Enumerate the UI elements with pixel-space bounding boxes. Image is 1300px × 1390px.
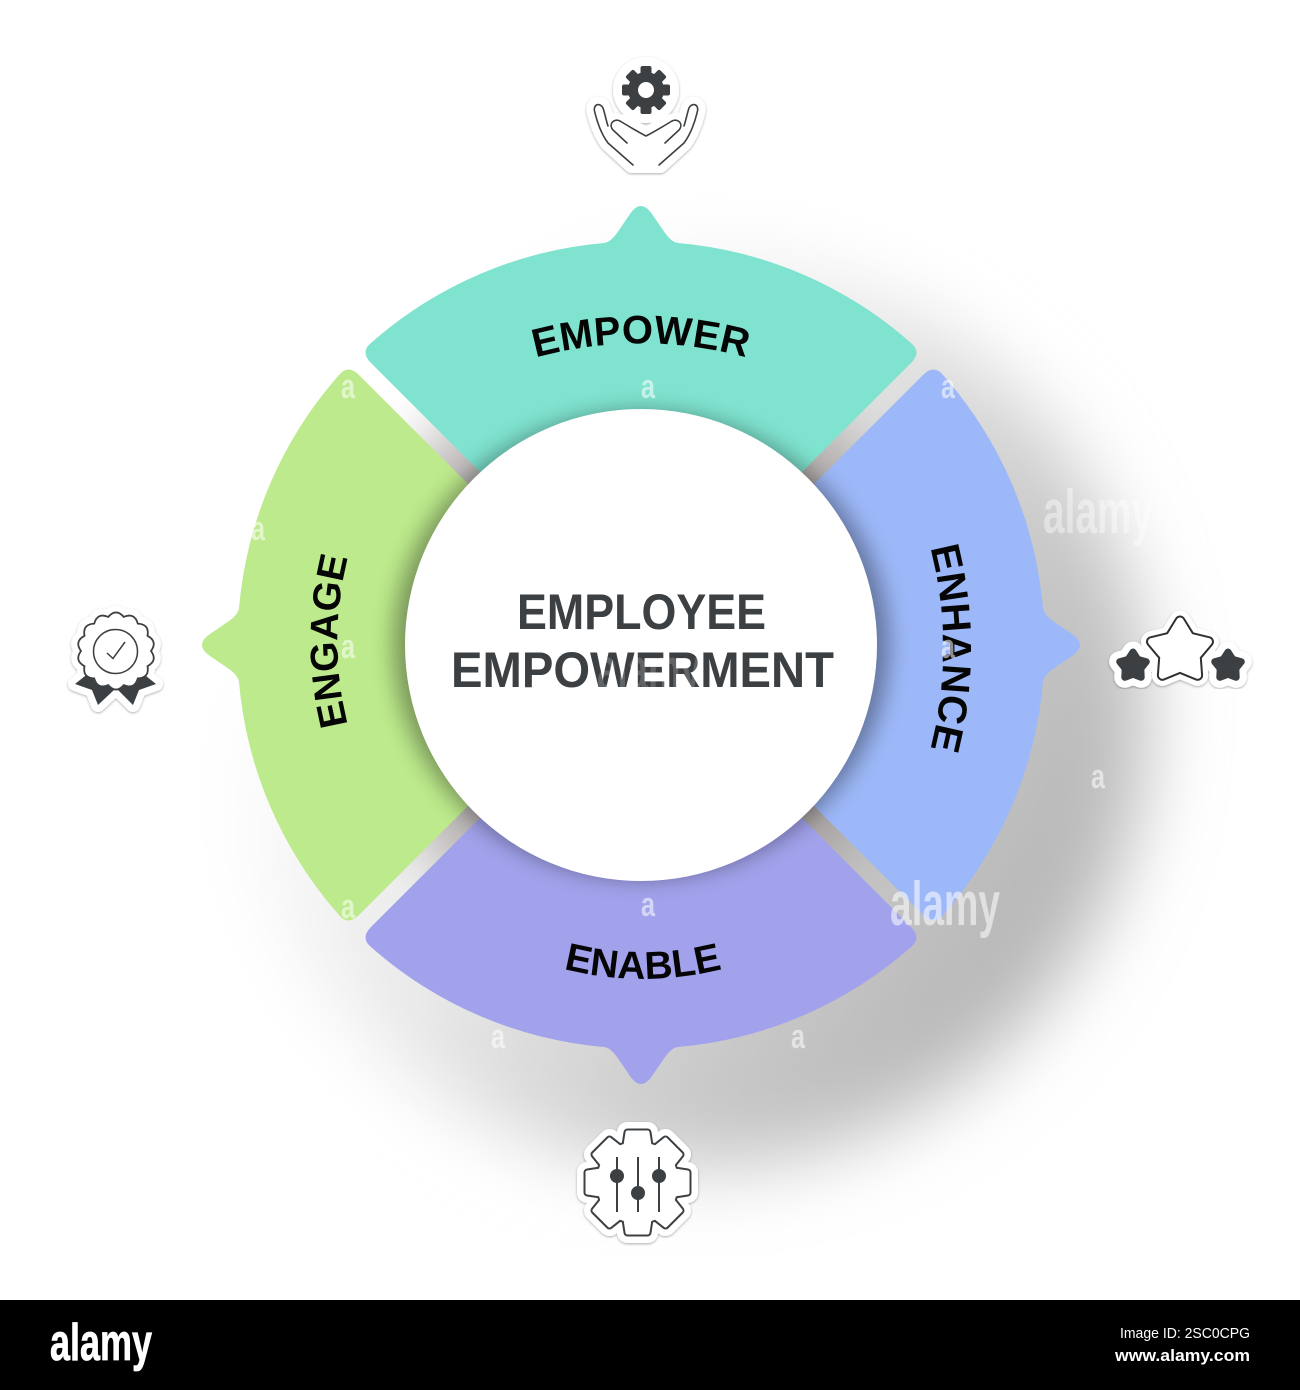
icon: hands holding gear	[594, 57, 698, 165]
watermarks: a	[941, 368, 956, 406]
title: Employee Empowerment: EMPOWERMENT	[451, 642, 834, 698]
panel: ring segments	[202, 206, 1080, 1084]
watermarks: a	[941, 628, 956, 666]
title: Employee Empowerment	[451, 584, 834, 698]
watermarks: a	[251, 510, 266, 548]
watermarks: alamy	[890, 870, 1000, 939]
footer logo: alamy	[50, 1314, 152, 1372]
background shadow of the ring	[234, 256, 1146, 1168]
watermarks: a	[641, 368, 656, 406]
footer bar	[0, 1300, 1300, 1390]
icon: award badge with check	[75, 612, 156, 705]
watermarks: a	[791, 1018, 806, 1056]
title: Employee Empowerment: EMPLOYEE	[517, 584, 766, 640]
watermarks: a	[641, 886, 656, 924]
watermarks: a	[491, 1018, 506, 1056]
footer url: www.alamy.com	[1114, 1346, 1250, 1365]
segment: Enable	[366, 751, 916, 1084]
label: Empower: EMPOWER	[532, 316, 749, 357]
gap shadow around centre	[351, 355, 931, 935]
segment: Enhance	[747, 370, 1080, 920]
icon: three stars	[1120, 621, 1241, 677]
watermarks: a	[341, 628, 356, 666]
label: Enable: ENABLE	[566, 943, 721, 979]
label: Engage: ENGAGE	[310, 554, 348, 728]
watermarks: alamy	[1043, 478, 1153, 547]
segment: Engage	[202, 370, 535, 920]
watermarks: a	[341, 888, 356, 926]
watermarks: a	[341, 368, 356, 406]
watermarks: a	[1091, 758, 1106, 796]
centre circle soft shadow	[393, 411, 889, 879]
icon: gear with sliders	[588, 1132, 688, 1232]
centre circle	[405, 409, 877, 881]
watermarks	[251, 368, 1153, 1056]
footer image id: Image ID: 2SC0CPG	[1120, 1325, 1250, 1342]
segment: Empower	[366, 206, 916, 539]
watermarks: alamy	[597, 636, 701, 703]
label: Enhance: ENHANCE	[930, 544, 971, 753]
